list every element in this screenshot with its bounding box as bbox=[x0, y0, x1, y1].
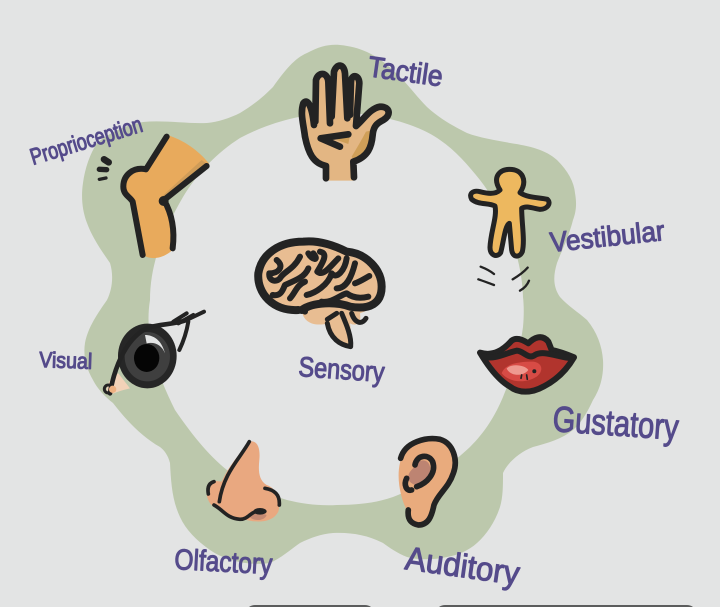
icon: nose (olfactory) bbox=[207, 441, 279, 522]
icon: hand (tactile) bbox=[302, 66, 389, 181]
icon: ear (auditory) bbox=[399, 439, 457, 526]
label: Auditory: Auditory bbox=[403, 539, 523, 592]
label: Visual: Visual bbox=[39, 347, 93, 374]
icon: knee (proprioception) bbox=[99, 135, 209, 258]
icon: lips (gustatory) bbox=[480, 337, 574, 392]
motion lines bbox=[478, 267, 529, 291]
label: Olfactory: Olfactory bbox=[174, 544, 274, 581]
label: Proprioception: Proprioception bbox=[27, 111, 145, 170]
label: Gustatory: Gustatory bbox=[551, 398, 680, 448]
icon: body figure (vestibular) bbox=[471, 169, 549, 291]
label: Sensory: Sensory bbox=[298, 351, 386, 388]
icon: brain (sensory) bbox=[258, 241, 382, 347]
bottom edge bars bbox=[247, 605, 695, 607]
icon: eye (visual) bbox=[104, 312, 204, 395]
label: Vestibular: Vestibular bbox=[548, 215, 666, 258]
label: Tactile: Tactile bbox=[366, 51, 445, 93]
panel: green wavy ring bbox=[82, 45, 603, 564]
